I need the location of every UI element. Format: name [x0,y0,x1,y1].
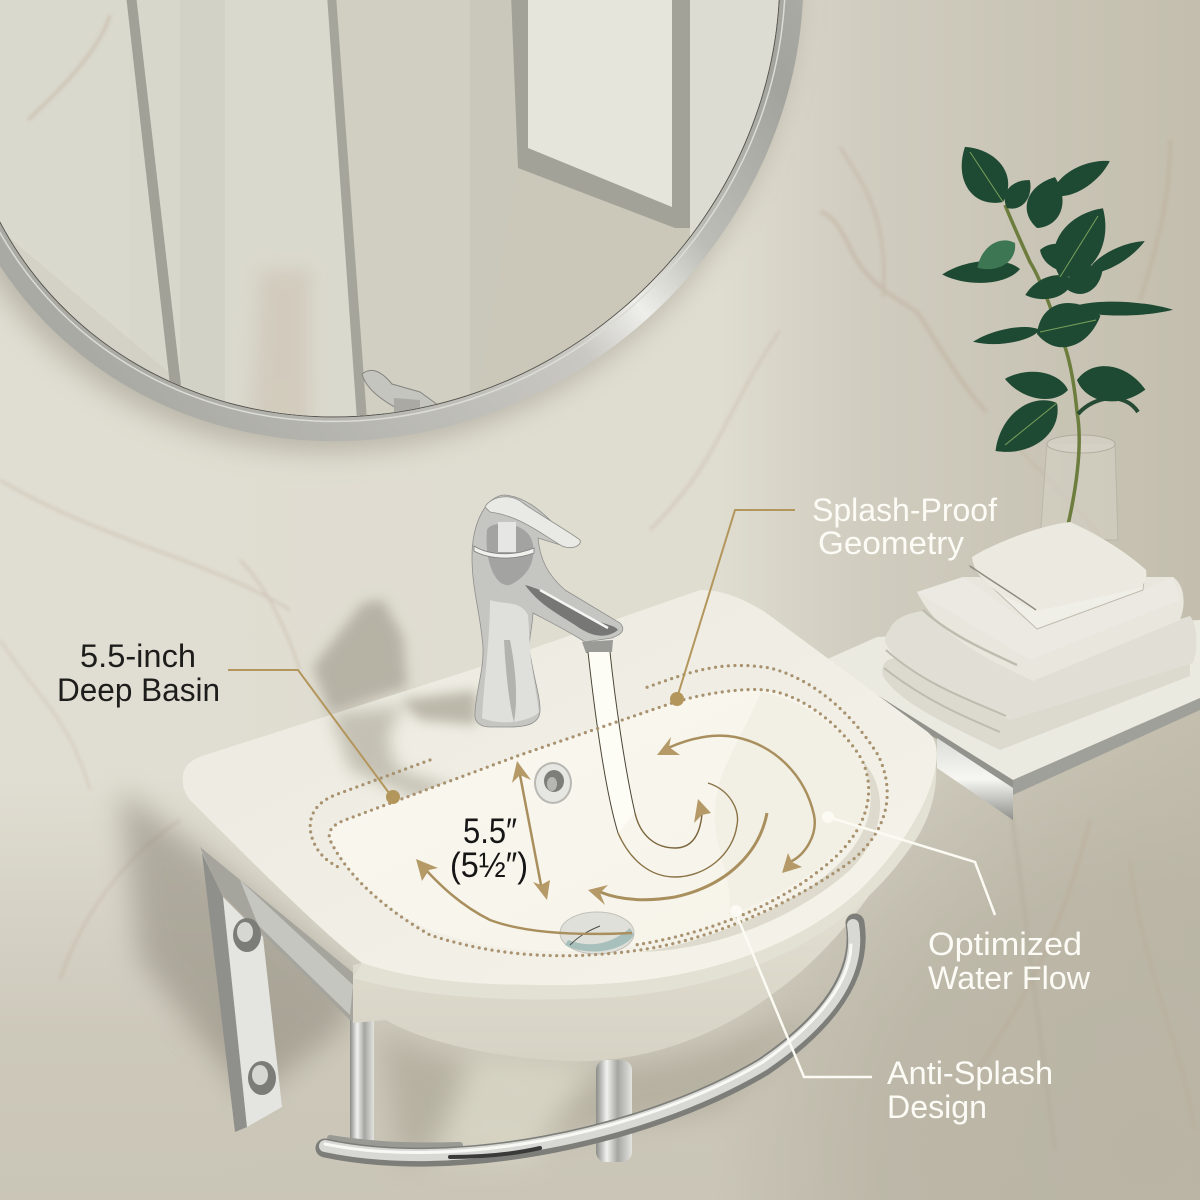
towels [882,522,1196,750]
faucet body [472,495,623,727]
flow arrows [416,736,815,934]
wall corner line [1012,815,1055,1150]
arrow: lower swirl [416,859,632,934]
callout: anti-splash design [730,905,1053,1125]
dotted basin outlines [310,665,887,956]
middle towel [917,577,1184,681]
support posts [350,1020,632,1162]
shelf [823,620,1200,820]
shadows on wall [120,790,360,1100]
mirror reflection: panels [0,221,130,360]
overflow ring [534,762,572,804]
sink bowl underside [353,820,915,1061]
deck shadows [330,705,460,800]
plant [941,136,1173,525]
callout: 5.5-inch deep basin: 5.5-inch [80,638,196,674]
light streak under sink [430,1055,598,1160]
sink top rim [183,590,937,985]
callout: splash-proof geometry: Splash-Proof [812,492,997,528]
faucet [472,495,623,727]
water stream [588,652,635,833]
basin bowl [329,690,880,952]
drain [560,912,634,954]
mirror reflection: faucet [362,370,438,412]
callout: anti-splash design: Anti-Splash [887,1055,1053,1091]
callout: optimized water flow: Optimized [928,926,1082,962]
mirror reflection: vertical lines [126,0,181,385]
wall bracket left [200,847,362,1132]
third towel [885,611,1196,720]
callout: optimized water flow: Water Flow [928,960,1091,996]
bottom towel [882,640,1190,750]
towel bar [325,923,856,1157]
callout: splash-proof geometry [670,492,997,706]
callout: 5.5-inch deep basin: Deep Basin [57,672,220,708]
depth measurement label: (5½″) [450,846,528,885]
arrow: inner swirl [618,783,738,877]
sink front edge shade [353,765,936,999]
arrow: depth double arrow [512,761,550,900]
bolts [233,918,276,1095]
depth measurement label: 5.5″ [463,812,517,851]
mirror shadow [0,0,970,628]
vase [1040,435,1118,540]
callout: anti-splash design: Design [887,1089,987,1125]
mirror reflection: window [511,0,690,228]
depth measurement label [450,812,528,885]
callout: 5.5-inch deep basin [57,638,400,804]
callout: splash-proof geometry: Geometry [818,525,964,561]
arrow: outer swirl [657,736,815,873]
mirror [0,0,803,441]
arrow: middle swirl [588,813,767,905]
top towel [968,565,1145,629]
callout: optimized water flow [822,811,1091,996]
